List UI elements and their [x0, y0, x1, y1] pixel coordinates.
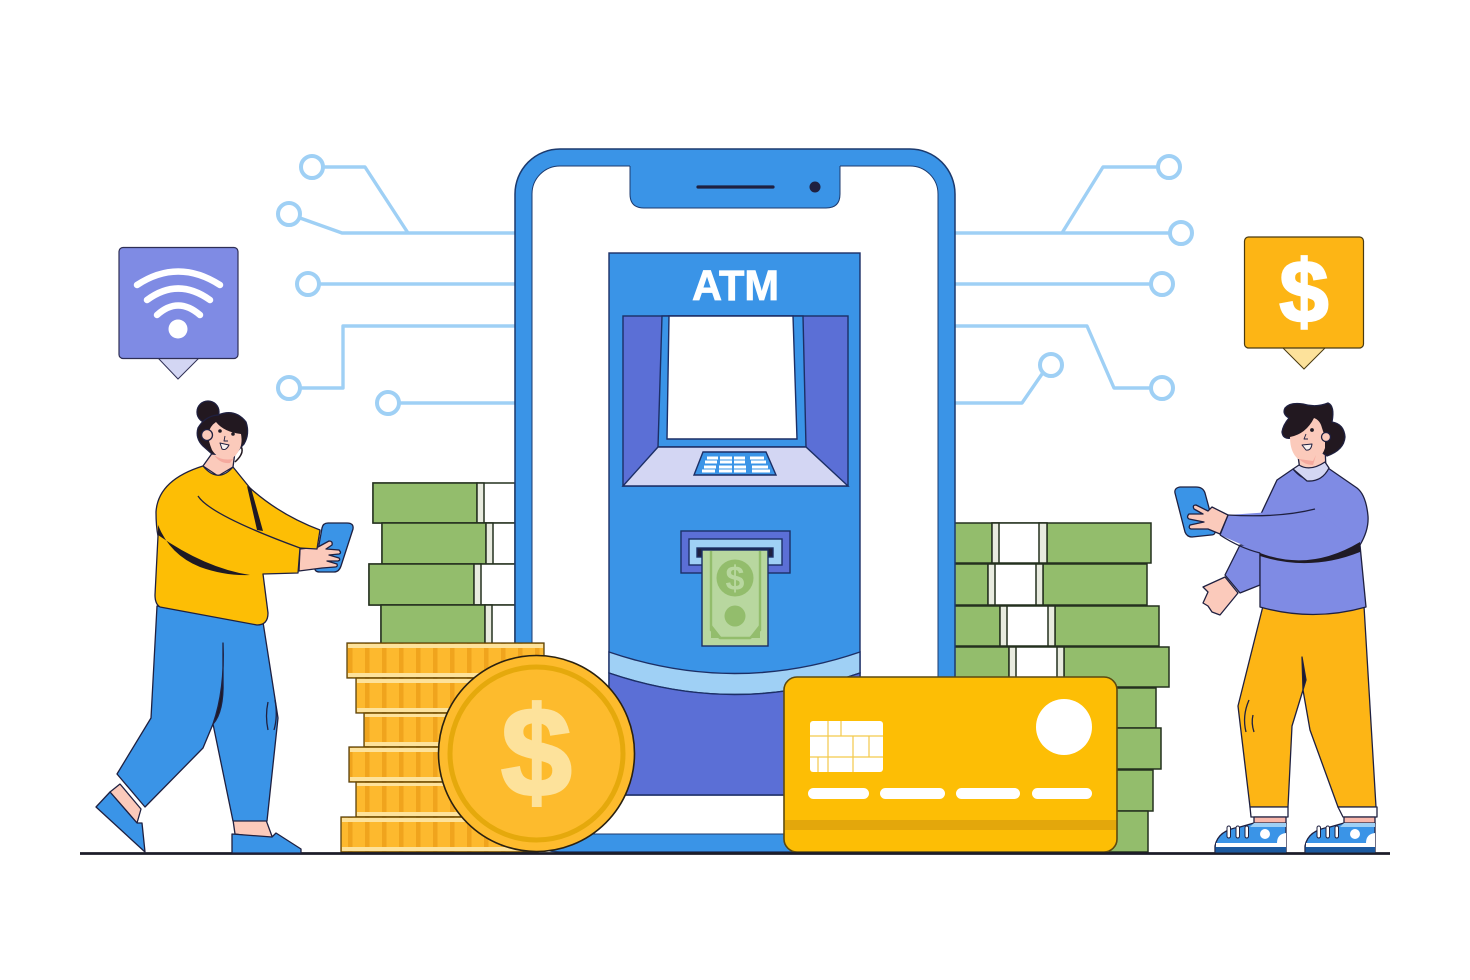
smartphone [515, 149, 955, 852]
card logo circle [1036, 699, 1092, 755]
left tablet [315, 523, 353, 572]
phone notch [630, 164, 840, 208]
person left: woman holding phone [96, 401, 353, 853]
person right: man holding phone [1175, 403, 1377, 852]
bag strap [1260, 542, 1360, 563]
neck [1298, 446, 1326, 470]
card chip [810, 721, 883, 772]
circuit lines left [278, 156, 515, 414]
cuffs [1250, 807, 1288, 817]
card number dashes [808, 788, 1092, 799]
front foot [233, 820, 273, 839]
rear arm [1225, 545, 1260, 593]
blush [214, 455, 233, 463]
large dollar coin: $ [501, 681, 572, 823]
ATM label: ATM [692, 262, 779, 310]
left hand [299, 541, 340, 571]
front shoe [232, 833, 301, 853]
lower hand [1203, 577, 1238, 615]
cash stack right [950, 523, 1169, 852]
hair back wisp [235, 445, 242, 462]
face [208, 422, 242, 460]
hair [197, 401, 248, 456]
blush [1299, 455, 1316, 465]
dollar speech bubble: $ [1280, 242, 1328, 341]
banknote [702, 550, 768, 646]
credit card [784, 677, 1117, 852]
atm recess back [658, 316, 806, 447]
large dollar coin [438, 656, 634, 852]
trousers [1238, 606, 1376, 807]
card stripe [785, 820, 1116, 830]
sweater [155, 466, 320, 625]
coin stack [341, 643, 561, 852]
trouser crease [213, 643, 223, 724]
atm base [609, 673, 860, 795]
collar [1293, 462, 1329, 481]
speaker [698, 185, 773, 189]
atm shelf [623, 447, 848, 486]
dollar speech bubble [1244, 237, 1364, 369]
sweater arm line [198, 496, 300, 548]
ankles [1254, 817, 1286, 824]
atm recess side panels [623, 316, 848, 486]
ear [1322, 432, 1330, 442]
shoes [1215, 823, 1375, 852]
hair [1282, 403, 1345, 456]
trouser crease [1302, 657, 1306, 690]
right tablet [1175, 487, 1215, 537]
bag strap upper [247, 486, 263, 531]
ATM machine [609, 253, 860, 795]
circuit lines right [955, 156, 1192, 403]
upper hand [1188, 505, 1228, 534]
neck [203, 452, 235, 476]
atm lower band [609, 652, 860, 694]
cash stack left [369, 483, 515, 644]
wifi icon [137, 272, 220, 338]
banknote: $ [726, 560, 745, 598]
face [1290, 418, 1325, 461]
back foot [110, 784, 141, 823]
bag strap lower [158, 525, 250, 575]
camera [810, 182, 820, 192]
trousers [117, 606, 278, 821]
wifi speech bubble [119, 248, 238, 379]
cash slot [681, 531, 790, 573]
atm keypad [694, 452, 776, 475]
ground line [80, 852, 1390, 855]
sweater [1260, 468, 1368, 614]
front sleeve [1220, 509, 1360, 564]
atm screen [667, 316, 797, 439]
ear [202, 430, 212, 440]
back shoe [96, 792, 145, 852]
